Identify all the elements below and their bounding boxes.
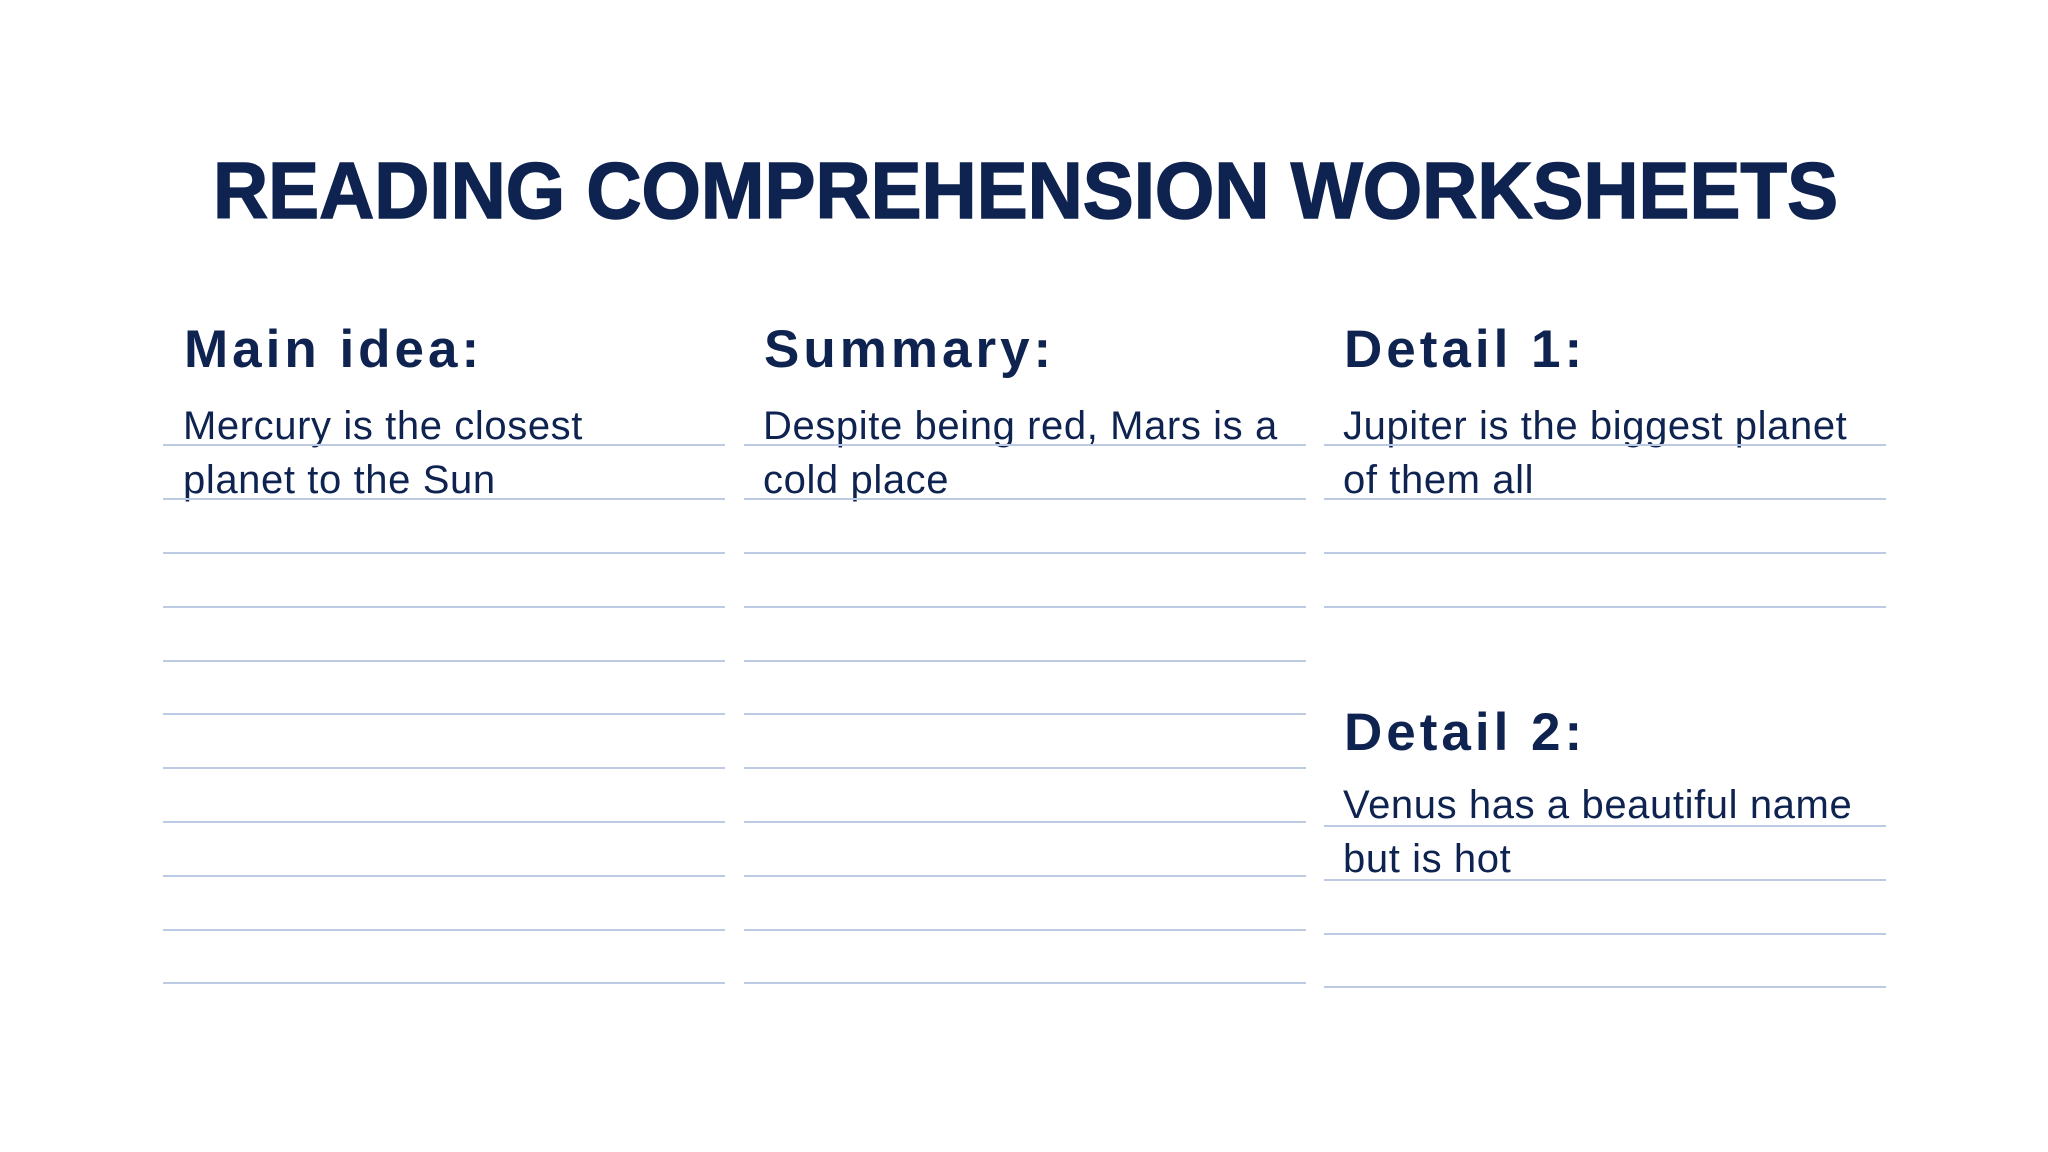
title: READING COMPREHENSION WORKSHEETS — [213, 146, 1838, 235]
text: summary: Despite being red, Mars is a — [763, 404, 1278, 448]
text: detail 2 — [1343, 783, 1852, 881]
text: summary: cold place — [763, 458, 949, 502]
heading: detail 2: Detail 2: — [1344, 703, 1586, 762]
text: summary — [763, 404, 1278, 502]
heading: summary: Summary: — [764, 320, 1055, 379]
text: detail 2: but is hot — [1343, 837, 1511, 881]
text: detail 1 — [1343, 404, 1847, 502]
text: main idea: planet to the Sun — [183, 458, 496, 502]
text: main idea — [183, 404, 583, 502]
text: detail 2: Venus has a beautiful name — [1343, 783, 1852, 827]
heading: main idea: Main idea: — [184, 320, 483, 379]
text: detail 1: of them all — [1343, 458, 1534, 502]
heading: detail 1: Detail 1: — [1344, 320, 1586, 379]
text: detail 1: Jupiter is the biggest planet — [1343, 404, 1847, 448]
text: main idea: Mercury is the closest — [183, 404, 583, 448]
